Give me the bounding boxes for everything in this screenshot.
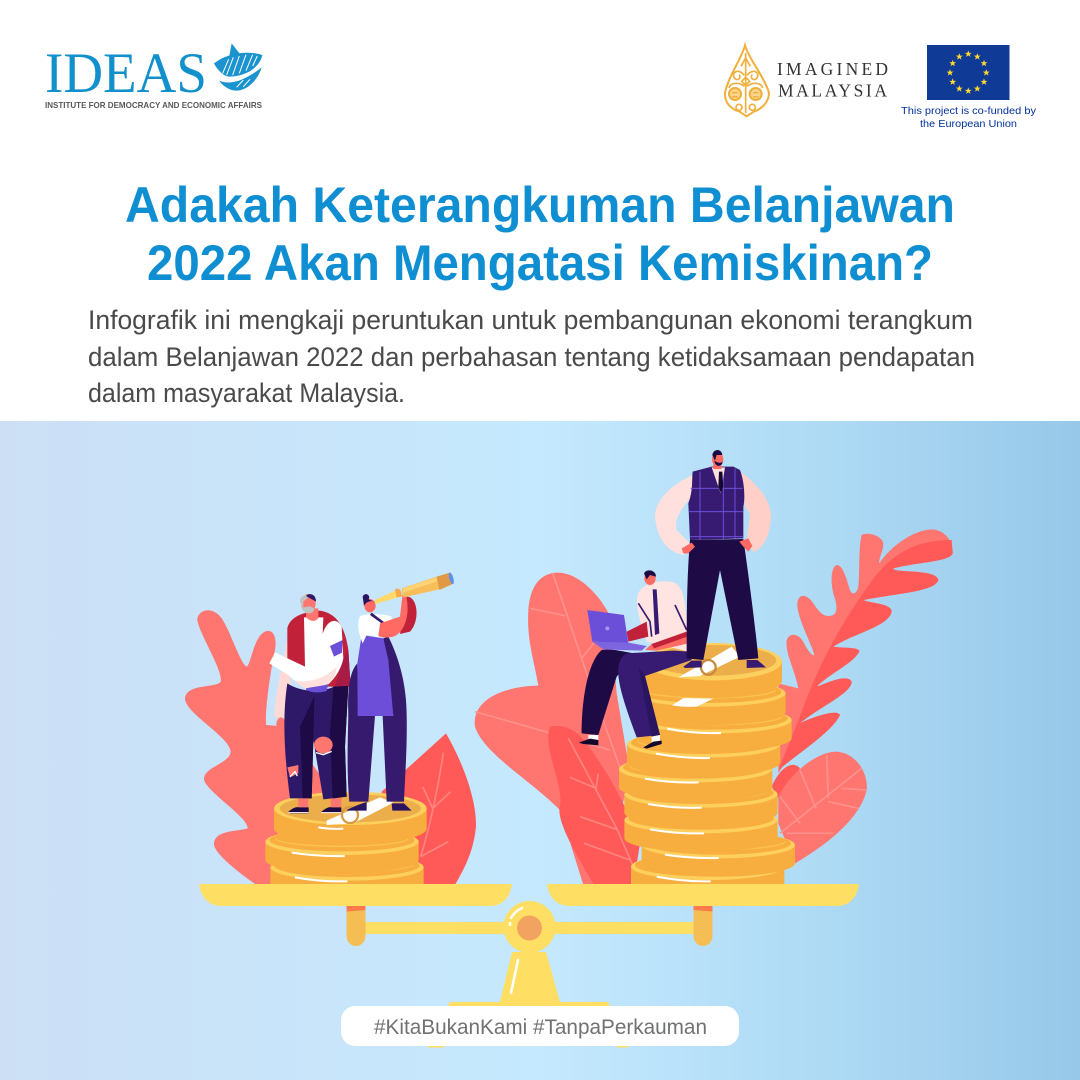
logo: IDEAS: INSTITUTE FOR DEMOCRACY AND ECONOMIC AFFAIRS bbox=[45, 101, 263, 110]
balance scale bbox=[199, 884, 859, 1048]
logo: Imagined Malaysia: IMAGINED bbox=[777, 59, 888, 79]
EU funding note bbox=[901, 105, 1037, 130]
intro text: dalam masyarakat Malaysia. bbox=[88, 378, 405, 408]
left upright bbox=[346, 906, 366, 946]
right lower salmon leaf bbox=[772, 752, 867, 863]
logo: Imagined Malaysia bbox=[725, 45, 888, 116]
scale arm bbox=[365, 922, 694, 934]
pivot bbox=[504, 901, 556, 993]
figure: older man bbox=[256, 594, 351, 813]
figure: standing man bbox=[655, 450, 771, 668]
figure: woman with telescope bbox=[347, 572, 455, 811]
right front red leaf bbox=[548, 726, 640, 885]
right big salmon leaf bbox=[475, 573, 630, 885]
right fern leaf bbox=[778, 529, 953, 773]
intro text: Infografik ini mengkaji peruntukan untuk pembangunan ekonomi terangkum bbox=[88, 305, 973, 335]
left tray bbox=[199, 884, 512, 906]
right tray bbox=[547, 884, 859, 906]
title bbox=[125, 177, 955, 291]
hashtag pill: #KitaBukanKami #TanpaPerkauman bbox=[374, 1015, 707, 1039]
left red leaf bbox=[382, 733, 476, 885]
background panel bbox=[0, 421, 1080, 1080]
left coin stack bbox=[265, 792, 427, 899]
title: Adakah Keterangkuman Belanjawan bbox=[125, 177, 955, 233]
intro text bbox=[88, 305, 975, 408]
logo: European Union flag bbox=[927, 45, 1010, 100]
left scene: low income bbox=[185, 572, 476, 899]
stand bbox=[499, 952, 561, 1006]
hashtag pill bbox=[341, 1006, 739, 1046]
figure: seated man with laptop bbox=[579, 570, 692, 749]
title: 2022 Akan Mengatasi Kemiskinan? bbox=[147, 235, 933, 291]
logo: Imagined Malaysia: MALAYSIA bbox=[778, 80, 887, 100]
logo: IDEAS: IDEAS bbox=[45, 42, 207, 105]
intro text: dalam Belanjawan 2022 dan perbahasan tentang ketidaksamaan pendapatan bbox=[88, 342, 975, 372]
right scene: high income bbox=[475, 450, 953, 898]
right coin stack bbox=[619, 643, 795, 898]
EU funding note: the European Union bbox=[920, 118, 1017, 130]
left salmon leaf bbox=[185, 610, 323, 885]
EU funding note: This project is co-funded by bbox=[901, 105, 1037, 117]
right upright bbox=[694, 906, 712, 946]
base of the scale bbox=[428, 1002, 628, 1048]
